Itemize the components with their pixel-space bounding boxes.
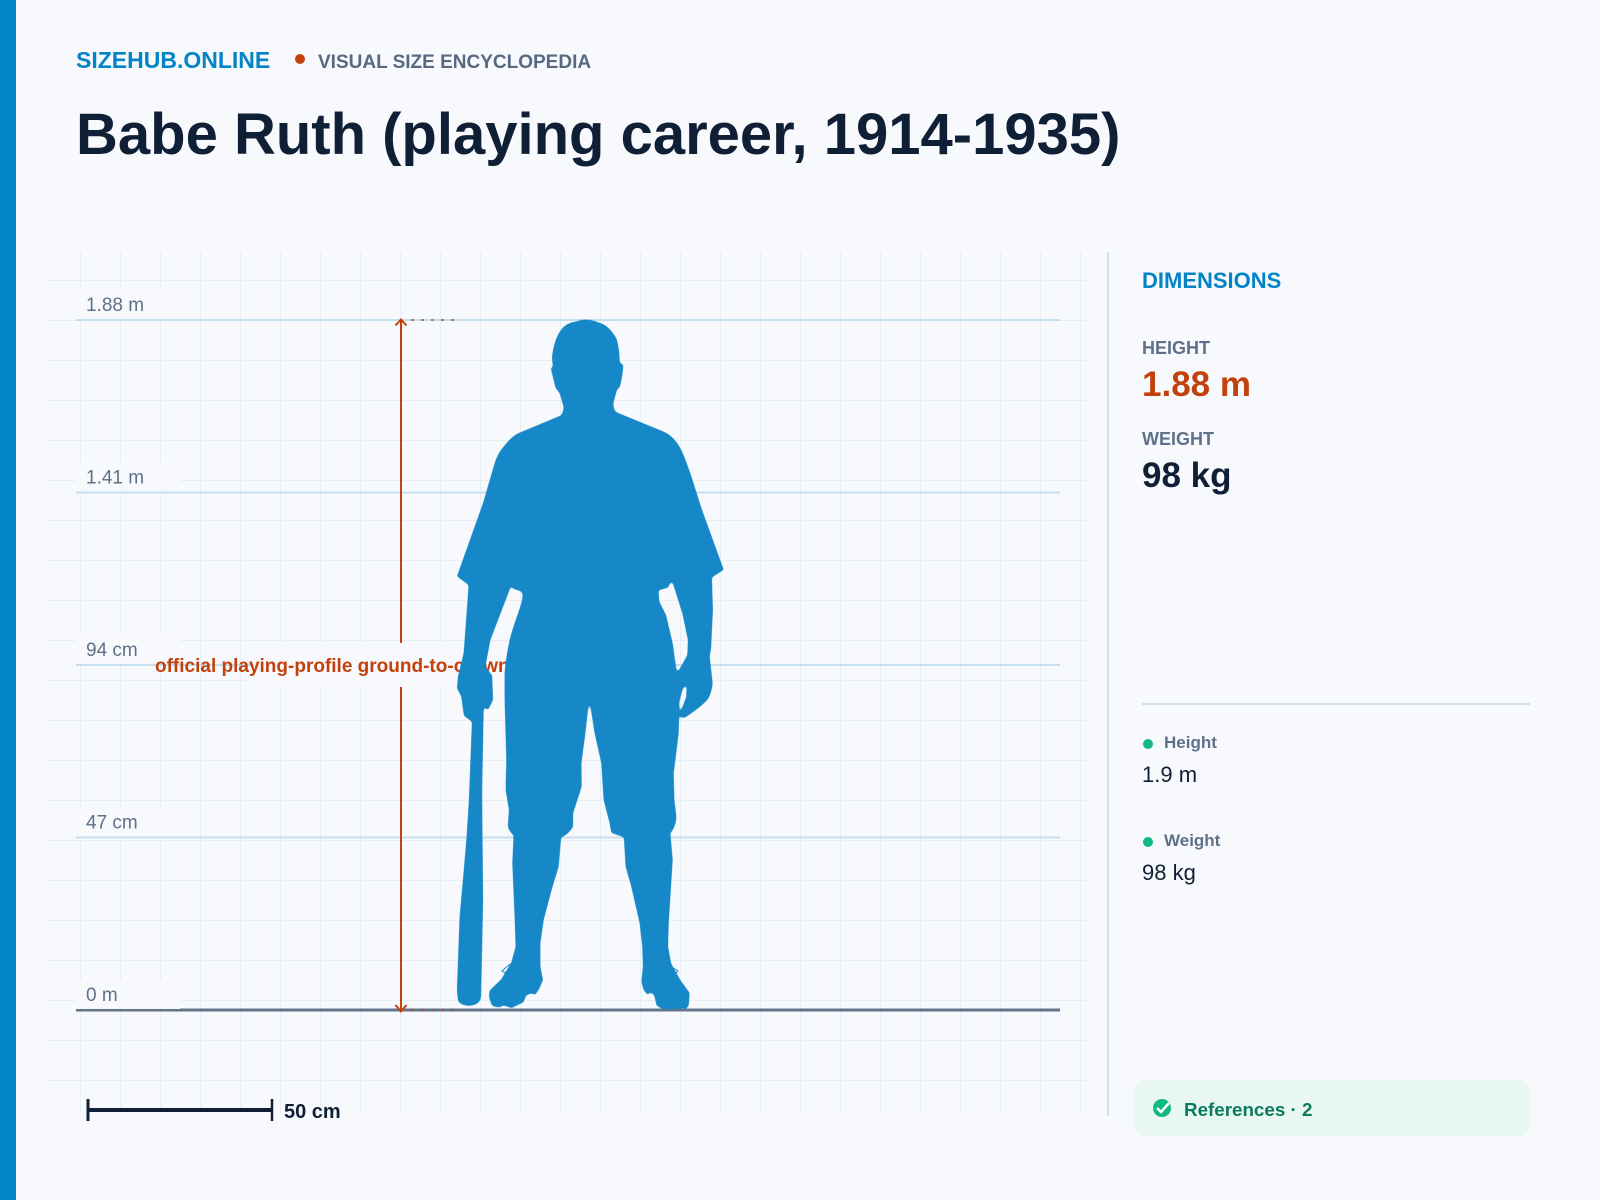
source item: weight: 98 kg <box>1142 860 1196 885</box>
scale labels <box>76 290 180 1009</box>
references badge <box>1134 1080 1530 1136</box>
reference lines <box>76 320 1060 838</box>
accent strip <box>0 0 16 1200</box>
weight stat <box>1142 429 1232 495</box>
ground line <box>76 1008 1060 1012</box>
weight stat: WEIGHT <box>1142 429 1214 449</box>
silhouette: batter with bat <box>456 319 724 1010</box>
height stat: 1.88 m <box>1142 365 1251 404</box>
icon: check circle <box>1153 1099 1171 1117</box>
weight stat: 98 kg <box>1142 456 1232 495</box>
source item: weight: Weight <box>1164 831 1221 850</box>
height annotation <box>155 643 551 687</box>
height arrow <box>396 319 406 1012</box>
header brand line: VISUAL SIZE ENCYCLOPEDIA <box>318 52 591 73</box>
scale labels: 0 m <box>86 985 118 1006</box>
source item: weight <box>1142 831 1221 885</box>
panel heading: DIMENSIONS <box>1142 268 1281 293</box>
height annotation: official playing-profile ground-to-crown <box>155 656 510 677</box>
shoe laces <box>502 964 678 973</box>
scale labels: 94 cm <box>86 640 138 661</box>
source item: height: 1.9 m <box>1142 762 1197 787</box>
chart: height scale <box>45 252 1088 1123</box>
scale labels: 47 cm <box>86 812 138 834</box>
references badge: References · 2 <box>1184 1099 1312 1120</box>
source item: height <box>1142 733 1217 787</box>
scale labels: 1.88 m <box>86 295 144 316</box>
title: Babe Ruth (playing career, 1914-1935) <box>76 102 1120 167</box>
height stat <box>1142 338 1251 404</box>
scale labels: 1.41 m <box>86 468 144 488</box>
side panel: dimensions <box>1108 252 1530 1136</box>
header brand line <box>76 47 591 73</box>
header brand line: SIZEHUB.ONLINE <box>76 47 270 73</box>
source item: height: Height <box>1164 733 1217 752</box>
height stat: HEIGHT <box>1142 338 1210 358</box>
scale bar: 50 cm <box>284 1101 341 1123</box>
height guide dots <box>411 320 456 1010</box>
